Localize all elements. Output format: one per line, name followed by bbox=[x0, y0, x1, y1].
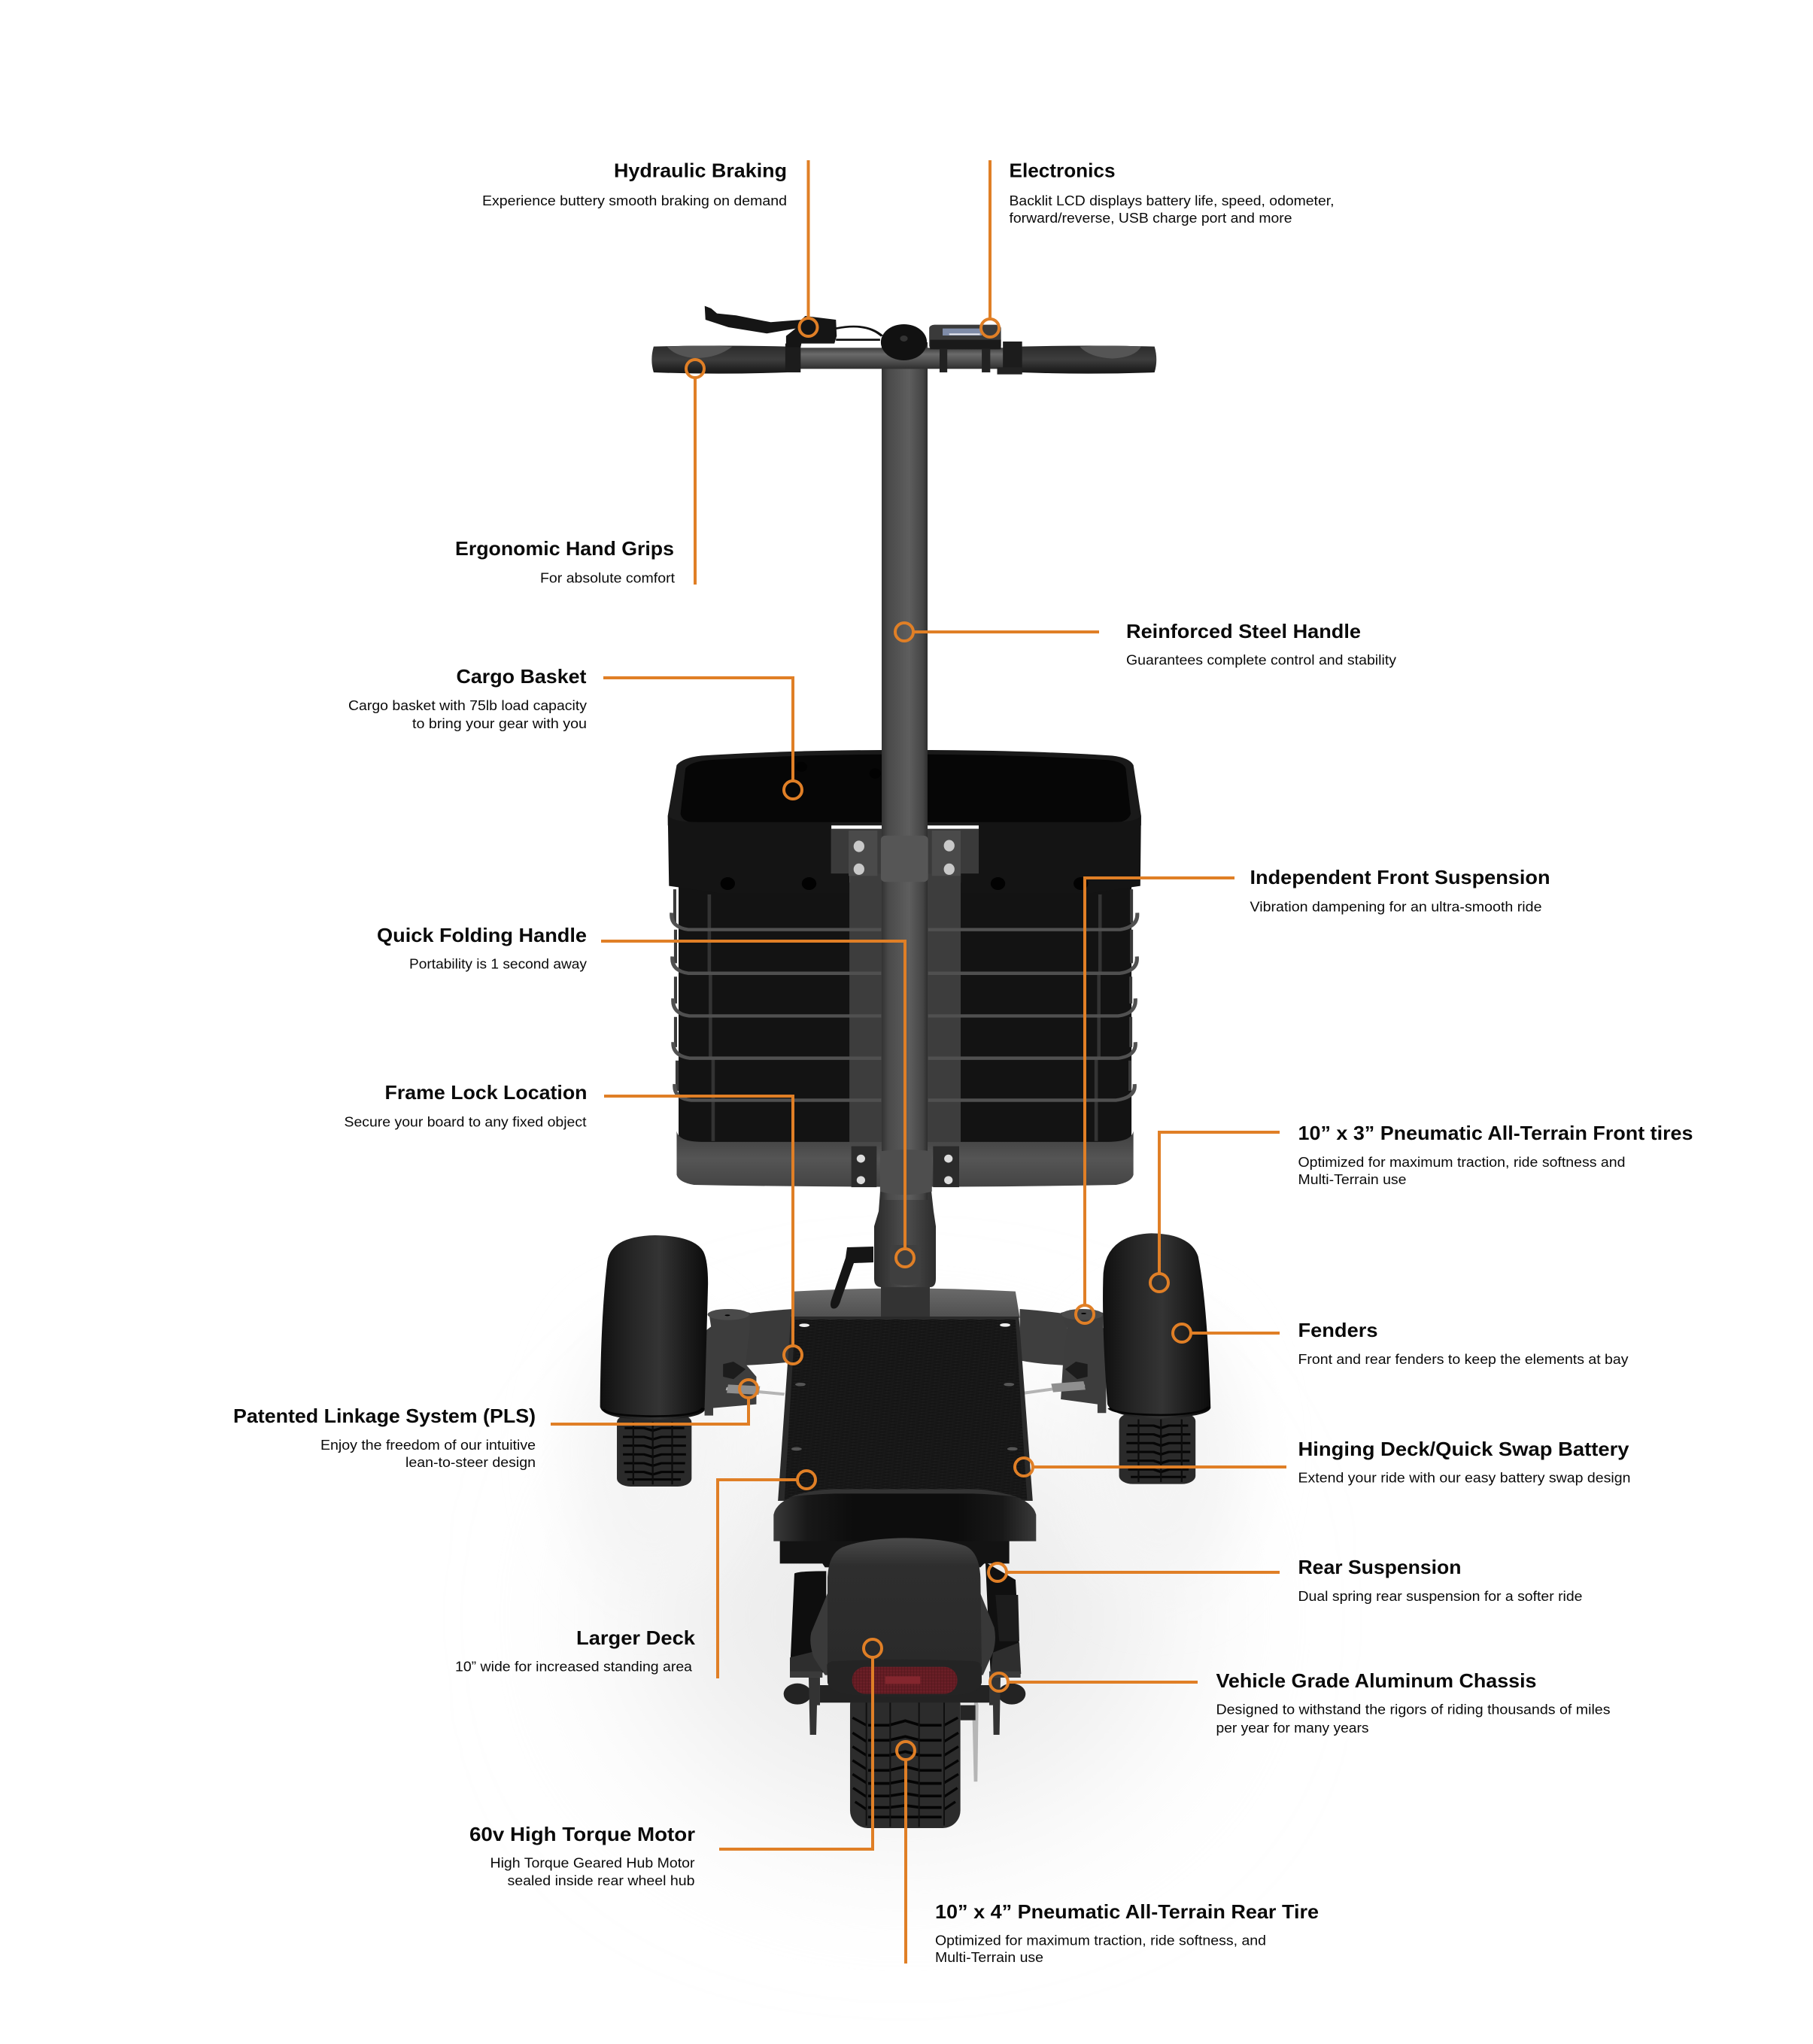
callout: Rear Suspension: Dual spring rear suspension for a softer ride bbox=[1298, 1589, 1583, 1604]
callout: 60v High Torque Motor: 60v High Torque Motor bbox=[469, 1823, 695, 1845]
callout: Fenders bbox=[1173, 1319, 1628, 1367]
lower clamp plates bbox=[852, 1147, 959, 1187]
callout: Rear Suspension bbox=[988, 1556, 1583, 1604]
callout: Rear Tire: Multi-Terrain use bbox=[935, 1950, 1043, 1965]
left kingpin bbox=[705, 1310, 756, 1416]
bottom tray bbox=[676, 1131, 1134, 1187]
callout: Fenders: Front and rear fenders to keep the elements at bay bbox=[1298, 1352, 1628, 1367]
callout: Vehicle Grade Aluminum Chassis: Vehicle Grade Aluminum Chassis bbox=[1216, 1669, 1536, 1692]
callout: Quick Folding Handle: Quick Folding Handle bbox=[377, 924, 587, 946]
callout: Rear Tire: 10” x 4” Pneumatic All-Terrain Rear Tire bbox=[935, 1900, 1319, 1923]
axle and brackets bbox=[784, 1672, 1025, 1735]
callout: Front tires: Multi-Terrain use bbox=[1298, 1172, 1407, 1187]
fender flanks bbox=[810, 1587, 845, 1675]
callout: Hinging Deck: Hinging Deck/Quick Swap Battery bbox=[1298, 1438, 1629, 1460]
callout: Front tires: Optimized for maximum traction, ride softness and bbox=[1298, 1155, 1625, 1170]
front wheels and suspension bbox=[600, 1233, 1210, 1487]
callout: Patented Linkage System: Enjoy the freedom of our intuitive bbox=[320, 1438, 536, 1453]
callout: Electronics: forward/reverse, USB charge port and more bbox=[1010, 211, 1292, 226]
callout: 60v High Torque Motor: sealed inside rear wheel hub bbox=[507, 1873, 695, 1888]
right kingpin bbox=[1061, 1310, 1106, 1413]
callout: Rear Tire bbox=[897, 1742, 1319, 1965]
callout: Cargo Basket: Cargo basket with 75lb load capacity bbox=[348, 698, 587, 713]
callout: Hydraulic Braking: Experience buttery smooth braking on demand bbox=[482, 193, 787, 208]
basket bbox=[668, 750, 1141, 1187]
center plate bbox=[849, 829, 961, 1148]
callout: Electronics bbox=[981, 159, 1335, 337]
callout: Hydraulic Braking: Hydraulic Braking bbox=[614, 159, 787, 182]
callout: Ergonomic Hand Grips: Ergonomic Hand Grips bbox=[455, 537, 674, 560]
bar clamps bbox=[785, 344, 800, 372]
callout: Electronics: Electronics bbox=[1010, 159, 1115, 182]
stem top cap bbox=[881, 324, 927, 360]
callout: Frame Lock Location bbox=[345, 1081, 802, 1364]
callout: Cargo Basket: Cargo Basket bbox=[456, 665, 587, 688]
callout: Reinforced Steel Handle bbox=[895, 620, 1396, 668]
callout: Vehicle Grade Aluminum Chassis bbox=[990, 1669, 1610, 1736]
right fender bbox=[1103, 1233, 1210, 1419]
right grip bbox=[1020, 345, 1156, 374]
callout: Cargo Basket bbox=[348, 665, 802, 799]
callout: Vehicle Grade Aluminum Chassis: Designed to withstand the rigors of riding thousands of miles bbox=[1216, 1702, 1610, 1717]
tail light bbox=[852, 1667, 958, 1694]
rear assembly bbox=[773, 1489, 1036, 1828]
left chassis plate bbox=[790, 1571, 826, 1672]
callout: Ergonomic Hand Grips bbox=[455, 360, 704, 585]
tail light housing bbox=[827, 1660, 982, 1698]
callout: Hydraulic Braking bbox=[482, 159, 817, 336]
left front tire bbox=[617, 1414, 691, 1487]
arms bbox=[743, 1309, 793, 1365]
callout: 60v High Torque Motor: High Torque Geared Hub Motor bbox=[490, 1855, 695, 1870]
basket lower body bbox=[679, 882, 1131, 1148]
left fender bbox=[600, 1235, 708, 1420]
callout: Rear Tire: Optimized for maximum traction, ride softness, and bbox=[935, 1933, 1266, 1948]
callout: Reinforced Steel Handle: Guarantees complete control and stability bbox=[1126, 653, 1396, 668]
callout: Reinforced Steel Handle: Reinforced Steel Handle bbox=[1126, 620, 1361, 642]
callout: Fenders: Fenders bbox=[1298, 1319, 1378, 1341]
callout: Larger Deck bbox=[455, 1471, 815, 1678]
callout: Larger Deck: Larger Deck bbox=[576, 1626, 696, 1649]
callout: Independent Front Suspension bbox=[1076, 866, 1550, 1323]
callout: Independent Front Suspension: Vibration dampening for an ultra-smooth ride bbox=[1250, 900, 1542, 915]
callout: Front tires bbox=[1150, 1122, 1693, 1292]
callout: Rear Suspension: Rear Suspension bbox=[1298, 1556, 1461, 1578]
deck grip mat bbox=[778, 1317, 1033, 1501]
callout: Front tires: 10” x 3” Pneumatic All-Terrain Front tires bbox=[1298, 1122, 1693, 1144]
callout: Frame Lock Location: Secure your board to any fixed object bbox=[345, 1115, 587, 1130]
left grip bbox=[651, 345, 787, 374]
scooter illustration bbox=[600, 306, 1210, 1828]
callout: Patented Linkage System: lean-to-steer design bbox=[405, 1455, 536, 1470]
callout: Ergonomic Hand Grips: For absolute comfort bbox=[540, 570, 675, 585]
deck bbox=[778, 1288, 1033, 1501]
callout: Patented Linkage System bbox=[233, 1380, 758, 1470]
callout: Larger Deck: 10” wide for increased standing area bbox=[455, 1660, 693, 1675]
wire rails bbox=[672, 913, 1137, 1100]
callout: Quick Folding Handle: Portability is 1 second away bbox=[409, 957, 587, 972]
bar tube bbox=[797, 348, 1005, 369]
handlebar bbox=[651, 306, 1156, 375]
callout: Quick Folding Handle bbox=[377, 924, 914, 1267]
callout: Patented Linkage System: Patented Linkage System (PLS) bbox=[233, 1405, 536, 1427]
rear deck shroud bbox=[780, 1540, 1010, 1567]
callout: Cargo Basket: to bring your gear with you bbox=[412, 716, 587, 731]
callout: Hinging Deck bbox=[1015, 1438, 1631, 1485]
callout: Independent Front Suspension: Independent Front Suspension bbox=[1250, 866, 1550, 888]
rear tire bbox=[850, 1687, 961, 1828]
callout: 60v High Torque Motor bbox=[469, 1639, 882, 1888]
right front tire bbox=[1119, 1413, 1195, 1484]
basket interior and rim bbox=[668, 750, 1141, 825]
floor shadow bbox=[572, 1317, 1241, 1828]
callout: Electronics: Backlit LCD displays battery life, speed, odometer, bbox=[1010, 193, 1335, 208]
right chassis plate bbox=[985, 1563, 1021, 1672]
tie rods bbox=[726, 1389, 785, 1394]
folding joint and neck bbox=[831, 1191, 936, 1317]
silver kickstand bbox=[973, 1693, 979, 1781]
brake lever bbox=[705, 306, 837, 348]
stem clamps bbox=[849, 831, 961, 1195]
callout: Hinging Deck: Extend your ride with our easy battery swap design bbox=[1298, 1470, 1631, 1485]
callout: Frame Lock Location: Frame Lock Location bbox=[385, 1081, 587, 1104]
callout: Vehicle Grade Aluminum Chassis: per year for many years bbox=[1216, 1721, 1369, 1736]
basket front flaps bbox=[668, 815, 849, 893]
rear fender bbox=[828, 1538, 982, 1665]
folding lever bbox=[831, 1247, 873, 1309]
deck head plate bbox=[791, 1288, 1020, 1318]
LCD display bbox=[929, 325, 1001, 349]
handle stem bbox=[882, 342, 928, 1200]
